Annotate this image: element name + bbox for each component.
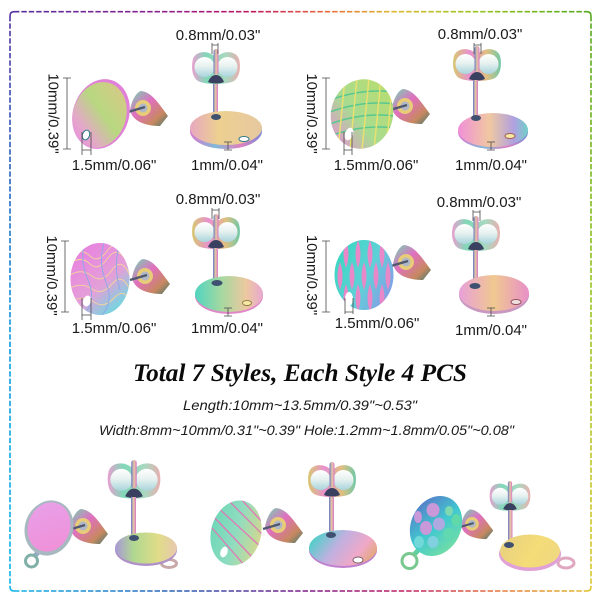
side view stud — [453, 46, 528, 149]
panel: style 4 leaf texture stud — [303, 194, 529, 339]
backing piece, angled — [459, 509, 493, 539]
front disc with hole — [63, 72, 139, 156]
pendant disc with loop — [17, 493, 81, 567]
dimension labels: 0.8mm/0.03" — [176, 27, 260, 44]
dimension labels — [303, 26, 527, 174]
dimension labels: 10mm/0.39" — [43, 235, 60, 316]
dimension labels: 1.5mm/0.06" — [334, 157, 418, 174]
panel: style 1 plain round stud — [44, 27, 263, 174]
width and hole specification: Width:8mm~10mm/0.31"~0.39" Hole:1.2mm~1.8mm/0.05"~0.08" — [99, 422, 515, 438]
panel: style 3 bubble texture stud — [43, 191, 263, 337]
dimension labels: 1mm/0.04" — [191, 320, 263, 337]
backing piece, angled — [263, 508, 303, 543]
product: dimpled pendant stud — [400, 481, 574, 571]
dimension labels: 0.8mm/0.03" — [438, 26, 522, 43]
dimension labels — [44, 27, 263, 174]
length specification: Length:10mm~13.5mm/0.39"~0.53" — [183, 397, 418, 413]
side view stud — [490, 481, 574, 571]
dimension labels: 1.5mm/0.06" — [72, 157, 156, 174]
side view stud — [192, 214, 263, 314]
dimension labels: 1mm/0.04" — [455, 157, 527, 174]
dimension labels: 1mm/0.04" — [455, 322, 527, 339]
backing piece, angled — [390, 89, 430, 124]
dimension markers — [322, 210, 495, 316]
dimension markers — [322, 43, 495, 155]
side view stud — [452, 216, 529, 314]
side view stud — [190, 49, 262, 149]
dimension labels: 10mm/0.39" — [303, 73, 320, 154]
front disc with crosshatch texture — [330, 79, 394, 149]
backing piece, angled — [130, 259, 170, 294]
dimension labels: 10mm/0.39" — [44, 73, 62, 154]
backing piece, angled — [128, 91, 168, 126]
dimension labels: 1mm/0.04" — [191, 157, 263, 174]
side view stud — [308, 462, 377, 568]
dimension labels: 10mm/0.39" — [303, 235, 320, 315]
dimpled pendant disc with loop — [400, 496, 462, 570]
backing piece, angled — [68, 509, 108, 544]
front disc with leaf texture — [334, 240, 394, 312]
dimension labels — [43, 191, 263, 337]
dimension labels — [303, 194, 527, 339]
front disc with bubble texture — [70, 243, 130, 315]
dimension labels: 1.5mm/0.06" — [335, 315, 419, 332]
dimension markers — [63, 43, 232, 155]
dimension labels: 0.8mm/0.03" — [437, 194, 521, 211]
backing piece, angled — [391, 245, 431, 280]
title: Total 7 Styles, Each Style 4 PCS — [133, 358, 467, 387]
panel: style 2 crosshatch stud — [303, 26, 528, 174]
dimension markers — [61, 208, 232, 320]
product: diagonal stripe stud — [203, 462, 377, 571]
dimension labels: 0.8mm/0.03" — [176, 191, 260, 208]
striped disc — [210, 500, 262, 566]
product: pendant stud with flat tray — [17, 460, 177, 568]
side view stud — [108, 460, 177, 568]
dimension labels: 1.5mm/0.06" — [72, 320, 156, 337]
